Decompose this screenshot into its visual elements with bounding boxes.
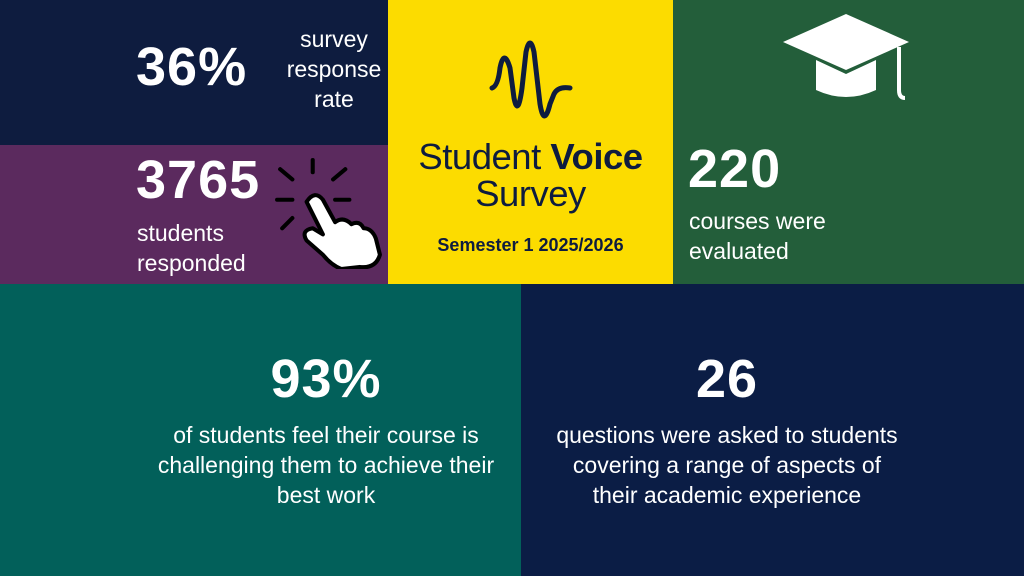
stat: 220: 220 xyxy=(688,139,781,199)
icon: graduation cap xyxy=(783,14,909,100)
text: questions: their academic experience xyxy=(593,482,861,508)
heading: Student Voice Survey xyxy=(418,136,643,214)
stat: 26: 26 xyxy=(696,349,758,409)
subheading: semester: Semester 1 2025/2026 xyxy=(437,235,624,255)
panel: courses xyxy=(673,0,1024,284)
icon: sound wave xyxy=(490,40,572,118)
panel: students responded xyxy=(0,145,388,284)
text: challenging: challenging them to achieve their xyxy=(158,452,494,478)
heading: Student Voice Survey: Student Voice xyxy=(418,136,643,177)
text: questions xyxy=(556,422,898,508)
panel: title xyxy=(388,0,673,284)
label: students responded: students xyxy=(137,220,224,246)
stat: 3765: 3765 xyxy=(136,150,260,210)
text: questions: questions were asked to students xyxy=(556,422,898,448)
panel: 93% xyxy=(0,284,521,576)
text: challenging xyxy=(158,422,494,508)
text: challenging: of students feel their course is xyxy=(173,422,479,448)
label: students responded xyxy=(137,220,246,276)
text: challenging: best work xyxy=(277,482,375,508)
label: courses were evaluated: evaluated xyxy=(689,238,789,264)
label: students responded: responded xyxy=(137,250,246,276)
heading: Student Voice Survey: Survey xyxy=(475,173,586,214)
panel: response rate xyxy=(0,0,388,145)
label: courses were evaluated: courses were xyxy=(689,208,826,234)
stat: 36%: 36% xyxy=(136,37,247,97)
panel: 26 questions xyxy=(521,284,1024,576)
text: questions: covering a range of aspects of xyxy=(573,452,881,478)
label: courses were evaluated xyxy=(689,208,826,264)
stat: 93%: 93% xyxy=(270,349,382,409)
icon: clicking hand xyxy=(275,158,382,269)
label: survey response rate: survey response rate xyxy=(287,26,381,112)
